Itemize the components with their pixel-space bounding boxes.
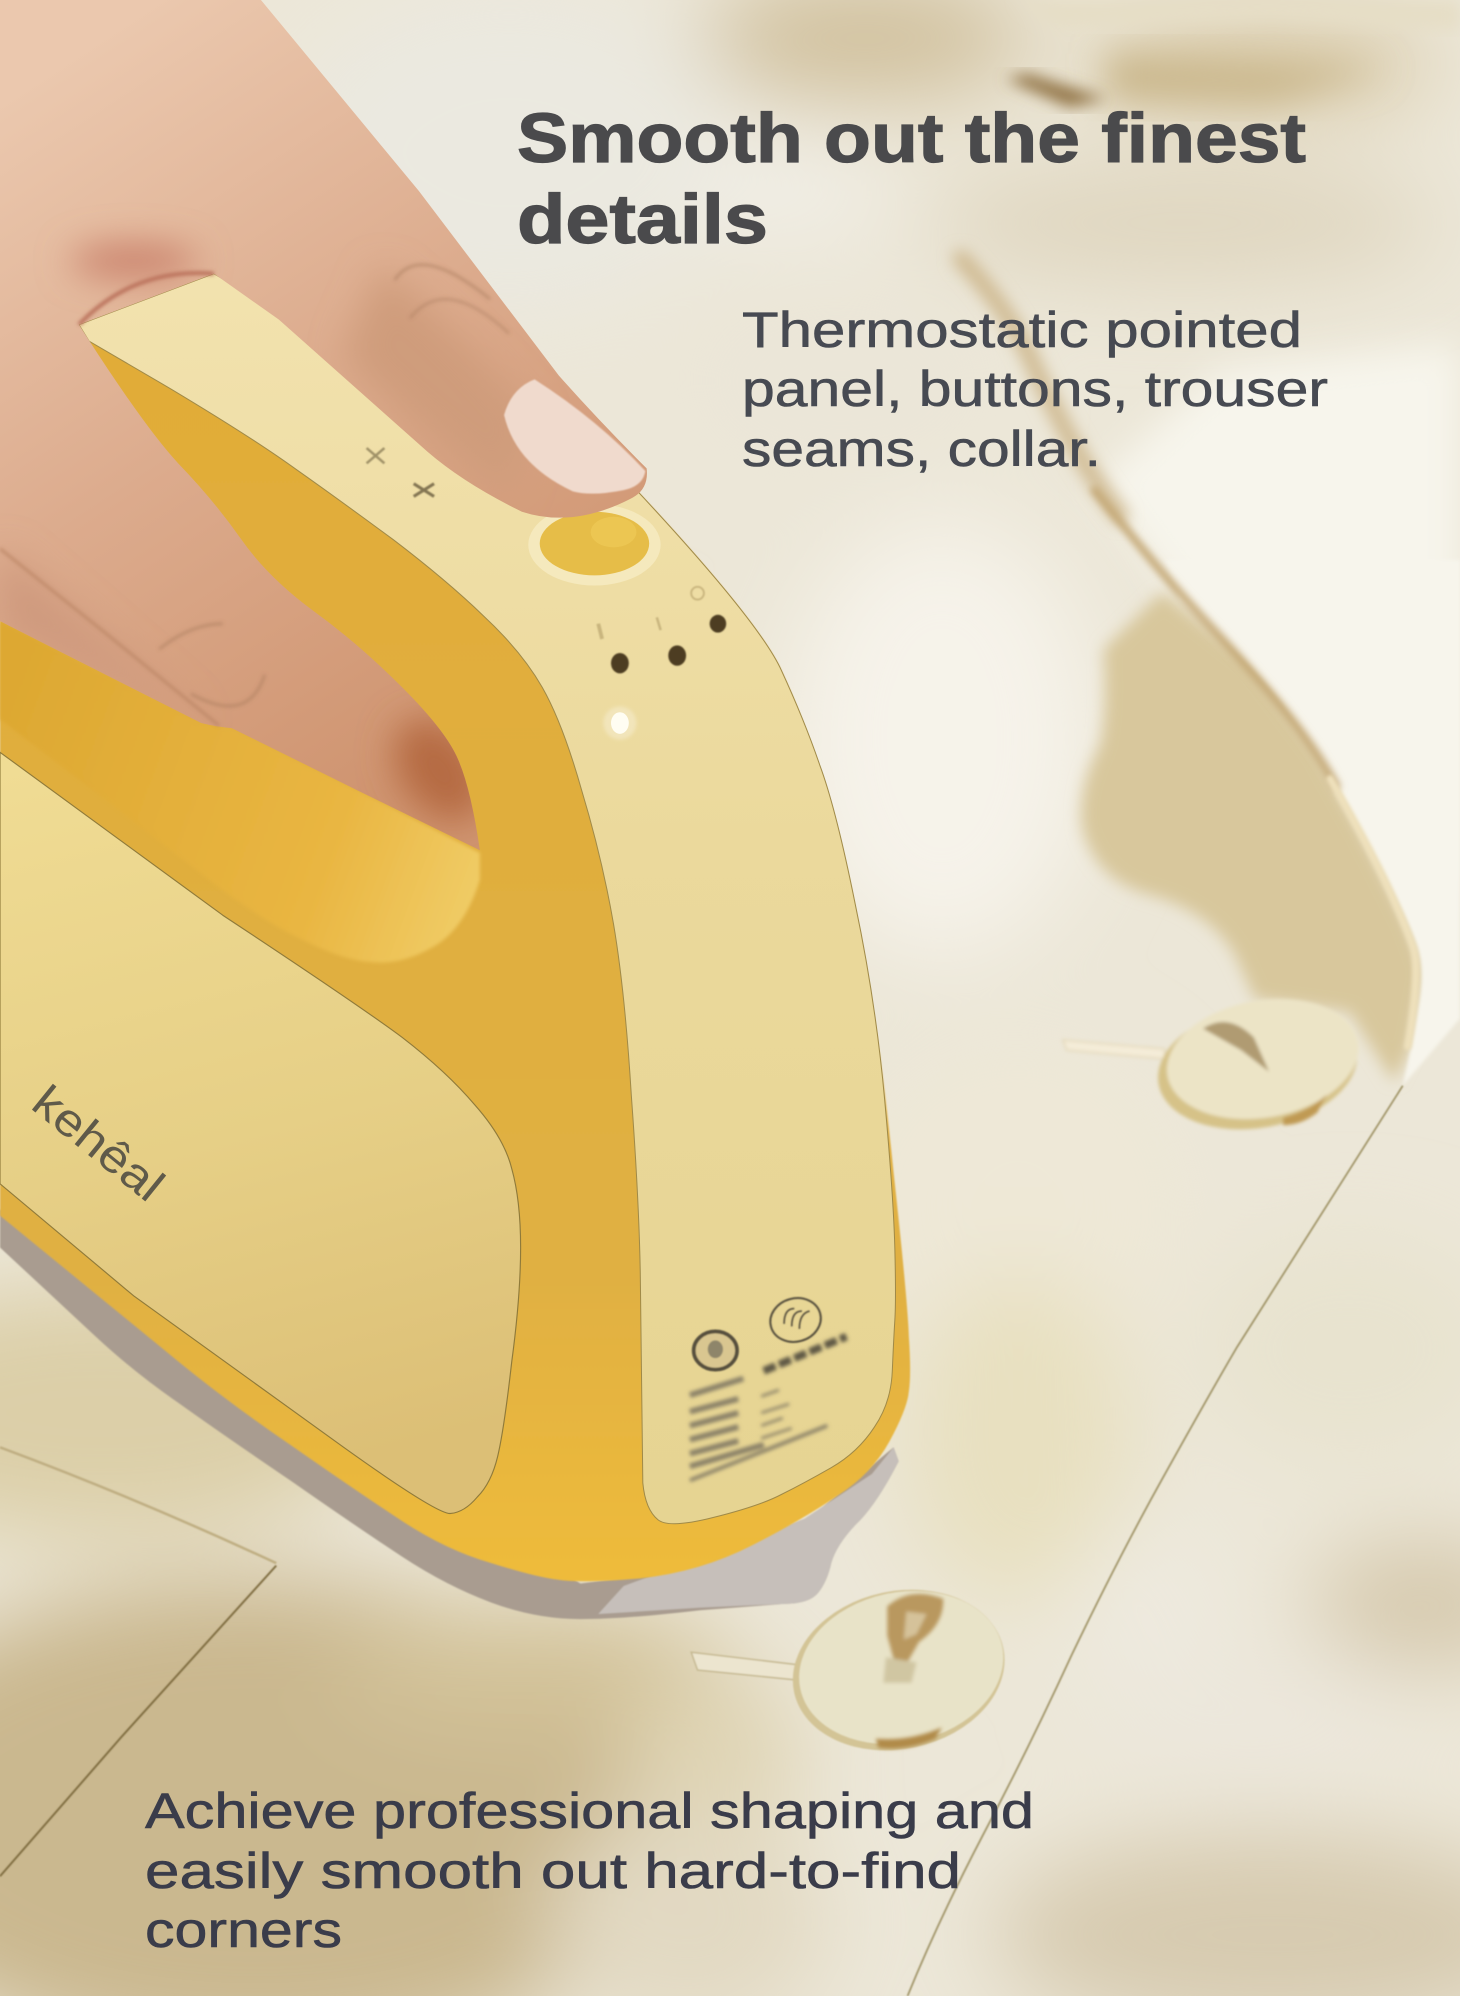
description: thermostatic panel: seams, collar. xyxy=(742,421,1101,477)
description: thermostatic panel: Thermostatic pointed xyxy=(742,302,1302,358)
top collar crease xyxy=(1006,0,1460,107)
indicator light xyxy=(603,706,636,740)
lower jacket button xyxy=(691,1571,1020,1769)
description: thermostatic panel: panel, buttons, trouser xyxy=(742,361,1328,417)
fabric seams xyxy=(0,1086,1403,1996)
iron cream side panel xyxy=(0,752,521,1514)
description: professional shaping: corners xyxy=(145,1902,342,1958)
title: Smooth out the finest xyxy=(517,99,1306,177)
certification label xyxy=(690,1293,846,1480)
lapel fold edge xyxy=(961,258,1416,1046)
indicator dots xyxy=(367,448,726,673)
iron soleplate xyxy=(0,1209,899,1619)
lapel shadow xyxy=(1081,592,1426,1082)
fingernail xyxy=(504,379,645,494)
finger shading xyxy=(0,244,535,838)
title: details xyxy=(517,180,768,258)
brand logo: kehêal xyxy=(23,1076,174,1211)
description: professional shaping: Achieve professional shaping and xyxy=(145,1783,1034,1839)
iron cream top panel xyxy=(79,274,895,1524)
upper jacket button xyxy=(1063,985,1368,1144)
iron handle opening xyxy=(0,621,480,963)
lapel xyxy=(1165,560,1460,1086)
iron yellow body xyxy=(0,274,910,1581)
hand and fingers xyxy=(0,0,647,850)
finger creases xyxy=(0,265,509,726)
description: professional shaping: easily smooth out hard-to-find xyxy=(145,1843,961,1899)
power button xyxy=(528,504,661,586)
iron xyxy=(0,274,910,1619)
hand xyxy=(0,0,647,850)
lapel soft area xyxy=(1095,344,1460,891)
